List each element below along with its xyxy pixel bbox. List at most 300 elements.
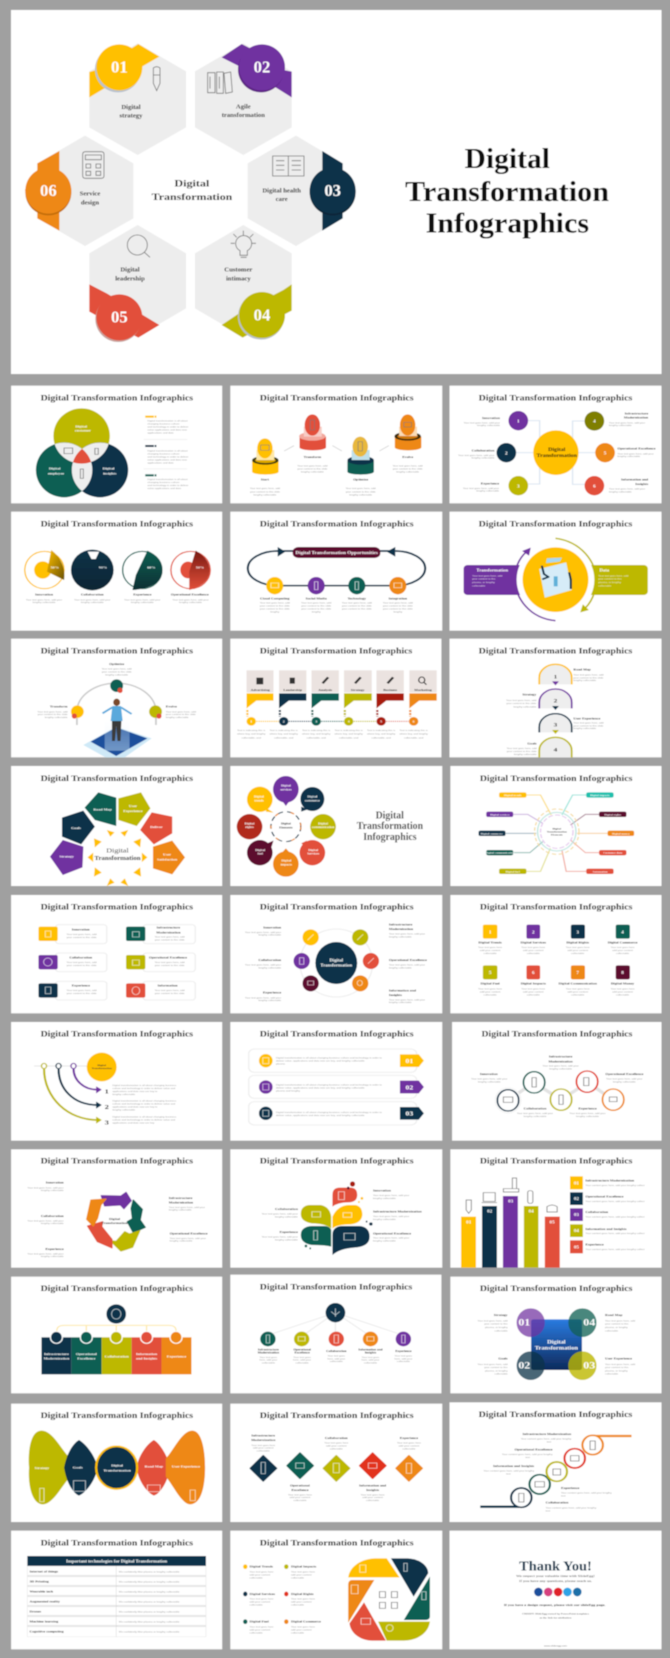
labels: lengthy collectable <box>275 1239 299 1241</box>
labels: plasma, or lengthy <box>485 1326 508 1329</box>
text column: Digital transformation is all about <box>147 420 188 423</box>
labels: text <box>561 1495 566 1498</box>
heading: Digital Transformation Infographics <box>41 774 193 784</box>
child nodes <box>260 1332 411 1346</box>
cards left: Collaboration <box>69 956 92 960</box>
labels: User Experience <box>573 717 601 720</box>
labels: Your text goes here <box>397 1442 422 1445</box>
labels <box>484 1432 612 1512</box>
slide side title: Transformation <box>357 821 424 832</box>
labels: your content to this <box>605 1366 629 1369</box>
panel: bar chart slide <box>450 1149 661 1268</box>
heading: Digital Transformation Infographics <box>480 1284 633 1294</box>
heading: Digital Transformation Infographics <box>479 1410 633 1420</box>
bow shapes: Strategy <box>35 1466 49 1470</box>
panel: staircase chain slide <box>450 1402 661 1522</box>
panel: orbit slide <box>230 895 442 1013</box>
labels: lengthy collectable <box>373 1197 397 1200</box>
labels: lengthy collectable <box>573 679 597 682</box>
pentagons: Road Map <box>93 808 112 811</box>
step marketing <box>399 670 437 739</box>
top icon <box>106 1304 126 1324</box>
table: We confidently filter plasma or lengthy collectable <box>119 1571 180 1573</box>
tiles row 2: add your content <box>612 991 633 994</box>
panel: shutter slide <box>230 1531 442 1649</box>
mind map connectors <box>505 795 608 871</box>
nodes: your content to this slide <box>342 608 372 611</box>
centre label and triangles: Transformation <box>94 855 141 862</box>
labels: collectable <box>402 1448 416 1450</box>
panel: zigzag rings slide <box>452 1022 661 1141</box>
labels: collectable <box>605 1373 619 1376</box>
legend: Your text goes here <box>291 1626 316 1628</box>
venn diagram: customer <box>75 429 91 433</box>
legend: Your text goes here <box>250 1626 274 1628</box>
panel: pentagons slide <box>11 766 222 886</box>
labels <box>262 1189 422 1243</box>
labels: Modernization <box>169 1201 193 1204</box>
step business: 5 <box>380 720 382 724</box>
venn diagram: Digital <box>103 467 114 471</box>
slide side title <box>357 811 424 843</box>
cards right: Your text goes here, add <box>155 961 185 964</box>
text column: applications and data <box>147 462 174 464</box>
column blocks: Operational <box>76 1352 97 1356</box>
card 01: plasma <box>276 1063 286 1066</box>
nodes: your content to this slide <box>383 605 413 608</box>
panel: bow shapes slide <box>11 1404 222 1522</box>
nodes: your content to this slide <box>301 608 332 611</box>
labels left: Experience <box>481 482 500 485</box>
labels: Innovation <box>263 926 281 929</box>
card 03: deliver value, applications and data now are key, and lengthy collectable <box>276 1114 365 1117</box>
legend: add your content <box>250 1629 271 1631</box>
labels: Your text goes here <box>288 1494 313 1496</box>
hexagon 01 digital strategy: strategy <box>120 113 143 120</box>
transformation box: Transformation <box>476 568 509 573</box>
labels: Modernization <box>251 1438 275 1442</box>
labels: lengthy collectable <box>275 1216 299 1218</box>
tiles row 1: 1 <box>489 930 492 934</box>
bubbles: Digital <box>307 795 317 799</box>
labels: lengthy collectable <box>41 1189 64 1192</box>
cards left: your content to this slide <box>67 936 97 939</box>
labels: Your text goes here, add <box>573 674 604 676</box>
pentagons: User <box>163 853 172 857</box>
legend: 02 <box>574 1197 580 1201</box>
labels: Your text goes here, add your <box>373 1237 409 1240</box>
legend: Digital Services <box>250 1592 276 1596</box>
heading: Digital Transformation Infographics <box>480 1157 633 1166</box>
chain rings <box>511 1435 603 1507</box>
centre label and triangles <box>88 830 147 886</box>
tiles row 1: 2 <box>532 930 535 934</box>
labels: your content to this <box>484 1323 508 1326</box>
bubbles: Digital <box>308 848 318 852</box>
main title: Transformation <box>405 177 609 208</box>
numbered text: Digital transformation is all about changing business <box>112 1116 177 1119</box>
ring innovation: 50% <box>51 566 59 569</box>
heading: Digital Transformation Infographics <box>41 1284 193 1294</box>
cards right: your content to this slide <box>155 939 185 941</box>
central circle with illustration <box>517 542 594 617</box>
labels: Experience <box>561 1486 580 1490</box>
panel: mind map slide <box>450 766 661 886</box>
pentagons: Strategy <box>59 855 74 858</box>
hexagon 01 digital strategy: 01 <box>111 58 128 77</box>
panel: three cards with tags slide <box>230 1022 442 1141</box>
labels: plasma, or lengthy <box>485 1370 508 1372</box>
labels right: Information and <box>621 478 648 482</box>
hexagon 02 agile transformation: transformation <box>222 112 265 119</box>
nodes: Integration <box>389 597 407 600</box>
labels: lengthy collectable <box>45 716 68 719</box>
tiles row 2: add your content <box>523 991 544 994</box>
labels: collectable <box>330 1360 344 1363</box>
labels: Transform <box>50 705 68 709</box>
panel: speech bubbles wheel slide <box>230 766 442 886</box>
ring operational excellence: lengthy collectable <box>179 601 203 604</box>
table: We confidently filter plasma or lengthy collectable <box>119 1621 180 1623</box>
cylinder start: lengthy collectable <box>254 494 277 496</box>
nodes: your content to this slide <box>301 605 332 608</box>
numbered nodes <box>497 411 615 495</box>
labels left: Innovation <box>482 416 500 420</box>
labels left: Your text goes here, add your <box>463 487 499 490</box>
labels: add your content <box>399 1445 420 1447</box>
numbered text: Digital transformation is all about changing business <box>112 1084 177 1087</box>
legend: Your content goes here, add your lengthy collect <box>585 1232 645 1235</box>
labels left: Collaboration <box>472 449 494 452</box>
data box: Data <box>600 568 610 573</box>
labels: Your text goes here, add your <box>169 1206 205 1209</box>
hexagon 04 customer intimacy <box>195 225 292 340</box>
labels: Operational Excellence <box>514 1448 553 1452</box>
cylinder evolve: lengthy collectable <box>396 471 420 474</box>
labels: Your content goes here, add your lengthy <box>484 1470 535 1472</box>
step advertising: Text is indicating this is <box>237 729 266 732</box>
labels: Goals <box>498 1357 508 1360</box>
labels: Your text goes here, add <box>605 1320 636 1323</box>
text column: changing business culture <box>147 423 180 426</box>
numbered text: Digital transformation is all about changing business <box>112 1100 177 1103</box>
labels: text <box>546 1510 550 1512</box>
tiles row 1: Digital Commerce <box>608 941 638 944</box>
tiles row 2: Digital Communication <box>558 982 597 986</box>
centre label: Digital <box>552 828 561 830</box>
heading: Digital Transformation Infographics <box>260 1030 414 1039</box>
cylinder evolve: your content to this slide <box>393 468 423 470</box>
cylinder start: your content to this slide <box>250 491 281 493</box>
labels: lengthy collectable <box>166 716 189 719</box>
labels: Modernization <box>548 1060 573 1063</box>
main title: Digital <box>464 144 550 175</box>
panel: arches slide <box>450 639 661 758</box>
labels: Your text goes here, add your <box>569 1112 606 1115</box>
hexagon 01 digital strategy <box>89 43 186 155</box>
text column: changing business culture <box>147 481 180 484</box>
bubbles: rights <box>245 825 255 829</box>
labels: Infrastructure <box>251 1434 276 1438</box>
ring innovation: lengthy collectable <box>33 601 56 604</box>
hexagon 03 digital health care: Digital health <box>262 187 301 194</box>
connectors <box>284 446 389 451</box>
column badges <box>50 1331 182 1343</box>
cards right: your content to this slide <box>155 964 185 967</box>
bar chart: 03 <box>508 1199 514 1204</box>
labels: Experience <box>280 1230 298 1234</box>
table: We confidently filter plasma or lengthy collectable <box>119 1591 180 1593</box>
labels: Your text goes here, add your <box>471 1078 508 1080</box>
labels <box>471 1055 644 1118</box>
table: Machine learning <box>29 1620 59 1623</box>
card 02: Digital transformation is all about changing business culture and technology in order to <box>276 1084 383 1087</box>
labels: Innovation <box>480 1072 498 1076</box>
cards left <box>38 925 107 1000</box>
step analysis: where key, and lengthy <box>302 733 331 736</box>
hexagon 05 digital leadership <box>89 225 186 342</box>
bubbles: impacts <box>281 863 293 866</box>
hexagon 02 agile transformation: Agile <box>236 103 251 110</box>
step advertising: where key, and lengthy <box>237 733 266 736</box>
labels left: lengthy collectable <box>476 490 500 493</box>
nodes: lengthy <box>270 611 280 613</box>
arc nodes <box>71 679 162 719</box>
labels: your content to this slide <box>573 677 604 679</box>
ring collaboration <box>71 550 114 604</box>
cards right: your content to this slide <box>155 992 185 995</box>
labels: Road Map <box>605 1313 623 1317</box>
labels: Collaboration <box>325 1436 348 1440</box>
legend: collectable <box>250 1604 263 1607</box>
tiles row 2: add your content <box>480 991 501 994</box>
nodes: your content to this slide <box>260 608 290 611</box>
step leadership: collectable, and <box>274 737 294 739</box>
labels: Collaboration <box>546 1501 569 1505</box>
labels: Collaboration <box>524 1107 546 1111</box>
labels: Strategy <box>494 1313 508 1317</box>
legend: Digital Commerce <box>291 1620 321 1624</box>
panel: hierarchy slide <box>230 1275 441 1393</box>
legend: Experience <box>585 1243 604 1246</box>
tiles row 1: Digital Rights <box>566 941 590 944</box>
labels: lengthy collectable <box>613 1081 636 1083</box>
tiles row 1: Digital Trends <box>478 941 503 944</box>
step strategy: 4 <box>348 720 350 724</box>
tiles row 1: add your content <box>612 949 633 952</box>
pills: Digital impacts <box>590 794 610 797</box>
nodes: your content to this slide <box>383 608 413 611</box>
nodes: Your text goes here, add <box>260 602 290 605</box>
data box: Your text goes here, add <box>598 575 629 577</box>
bubbles: Digital <box>281 784 291 788</box>
labels: Your text goes here, add <box>478 1320 508 1323</box>
step analysis: Analysis <box>318 688 333 692</box>
labels: Your text goes here, add your <box>389 964 425 967</box>
labels: lengthy collectable <box>389 1001 412 1004</box>
translucent circles: 04 <box>583 1318 596 1328</box>
orbit: Transformation <box>320 963 353 967</box>
column blocks: Excellence <box>77 1357 96 1361</box>
arc <box>77 683 156 725</box>
labels: collectable <box>495 1330 508 1332</box>
bubbles: Digital <box>254 795 264 799</box>
card 01: Digital transformation is all about changing business culture and technology in order to <box>276 1057 383 1060</box>
tiles row 2: 6 <box>532 971 535 975</box>
text column: changing business culture <box>147 453 180 455</box>
spokes <box>516 421 596 484</box>
labels: Your text goes here, add your <box>606 1078 643 1080</box>
labels left: Your text goes here, add your <box>458 454 495 457</box>
tiles row 2: Your text goes here <box>478 988 503 991</box>
cylinder optimize: your content to this slide <box>346 491 376 493</box>
pills: Automation <box>592 871 608 873</box>
labels right: lengthy collectable <box>609 424 632 427</box>
labels: lengthy collectable <box>105 674 129 676</box>
table: We confidently filter plasma or lengthy collectable <box>119 1631 180 1633</box>
labels: Goals <box>527 742 537 745</box>
labels <box>251 1434 422 1502</box>
thank you message <box>516 1574 595 1584</box>
labels: Your content goes here, add your lengthy <box>561 1492 612 1495</box>
labels: Information and <box>359 1484 386 1488</box>
labels right: Operational Excellence <box>617 447 656 451</box>
labels: Operational <box>293 1348 311 1351</box>
hexagon 04 customer intimacy: intimacy <box>226 276 251 283</box>
legend: Information and Insights <box>585 1227 627 1231</box>
labels: lengthy collectable <box>513 706 537 708</box>
numbered text: 3 <box>105 1119 109 1126</box>
nodes: your content to this slide <box>342 605 372 608</box>
text column: and technology in order to deliver <box>147 426 189 429</box>
column blocks: Collaboration <box>105 1355 129 1358</box>
centre wheel: Digital <box>281 822 291 825</box>
hexagon 02 agile transformation: 02 <box>254 58 270 77</box>
labels: Evolve <box>166 705 177 709</box>
panel: curved arrows slide <box>11 1022 222 1141</box>
step analysis <box>302 670 344 739</box>
step business: collectable, and <box>372 737 391 739</box>
labels: Your text goes here, add your <box>517 1112 553 1115</box>
column blocks: Modernization <box>44 1357 69 1361</box>
table: Wearable tech <box>29 1590 53 1593</box>
labels: lengthy collectable <box>169 1209 192 1212</box>
bow shapes <box>29 1431 205 1504</box>
nodes: lengthy <box>312 611 322 613</box>
tiles row 2: Digital Fuel <box>480 982 500 986</box>
labels: Your text goes here, add your <box>262 1236 298 1238</box>
ring innovation: Your text goes here, add your <box>26 599 62 601</box>
tiles row 2: collectable <box>616 994 630 997</box>
labels: lengthy collectable <box>170 1240 193 1243</box>
panel: diamonds slide <box>230 1404 442 1522</box>
legend: collectable <box>250 1577 263 1579</box>
legend <box>243 1564 321 1634</box>
bubbles: commerce <box>305 799 320 802</box>
tiles row 2: 8 <box>621 971 625 975</box>
bubbles: fuel <box>257 852 263 856</box>
labels: lengthy collectable <box>389 967 412 969</box>
top node <box>326 1303 345 1322</box>
venn diagram: Digital <box>75 425 87 428</box>
card 01: 01 <box>406 1059 414 1065</box>
legend: Your content goes here, add your lengthy collect <box>585 1200 645 1203</box>
labels: lengthy collectable <box>478 1081 501 1083</box>
labels: Your text goes here, add your <box>27 1220 64 1222</box>
labels: add your content <box>290 1496 311 1499</box>
legend: 03 <box>574 1213 580 1217</box>
labels: lengthy collectable <box>524 1115 547 1118</box>
text column: Digital transformation is all about <box>147 450 188 452</box>
labels: Your text goes here, add your <box>170 1237 206 1240</box>
step business: where key, and lengthy <box>367 733 396 736</box>
numbered nodes: 1 <box>517 419 520 423</box>
labels: Your text goes here, add <box>573 722 604 724</box>
panel: table slide <box>11 1531 222 1649</box>
tiles row 2: collectable <box>484 994 497 997</box>
banner <box>293 547 380 558</box>
labels: Your text goes here, add <box>605 1363 636 1366</box>
labels: lengthy collectable <box>258 934 282 937</box>
labels: your content to this slide <box>507 750 537 753</box>
heading: Digital Transformation Infographics <box>260 903 414 912</box>
ring operational excellence: 50% <box>196 566 204 569</box>
legend: add your content <box>250 1574 271 1576</box>
legend: Operational Excellence <box>585 1195 624 1198</box>
labels: Your text goes here, add your <box>245 931 281 934</box>
ring collaboration: lengthy collectable <box>81 601 104 604</box>
slide side title: Digital <box>376 811 404 821</box>
labels: here, add your <box>293 1359 311 1362</box>
bubbles: services <box>280 788 292 792</box>
labels: your content to this <box>484 1366 508 1369</box>
panel: cover slide <box>11 10 662 374</box>
legend: add your content <box>250 1601 271 1604</box>
hexagon 02 agile transformation <box>195 43 292 155</box>
pills: Digital services <box>490 814 510 816</box>
panel: speech leaf shapes slide <box>230 1149 442 1268</box>
legend: collectable <box>291 1577 305 1579</box>
nodes: Your text goes here, add <box>383 602 414 605</box>
hexagon 04 customer intimacy: Customer <box>224 267 252 274</box>
venn diagram: employee <box>48 472 64 475</box>
legend: Digital Rights <box>291 1592 314 1596</box>
heading: Digital Transformation Infographics <box>260 1538 414 1548</box>
tiles row 2: Your text goes here <box>611 988 635 991</box>
labels: plasma, or lengthy <box>605 1326 629 1329</box>
bar icons <box>466 1178 557 1213</box>
labels: lengthy collectable <box>41 1222 64 1225</box>
legend: 05 <box>574 1245 580 1249</box>
venn diagram: insights <box>103 472 117 475</box>
translucent circles <box>517 1308 597 1380</box>
labels: Your text goes here, add <box>102 668 132 671</box>
labels: Your text goes here, add your <box>373 1215 409 1218</box>
nodes <box>260 577 414 613</box>
labels right: lengthy collectable <box>617 455 641 458</box>
heading: Digital Transformation Infographics <box>260 520 414 529</box>
numbered nodes: 6 <box>593 484 596 488</box>
labels: collectable <box>397 1360 411 1363</box>
labels: Modernization <box>389 927 413 931</box>
ring operational excellence <box>171 551 210 604</box>
bubbles: Services <box>307 852 320 856</box>
labels: Information and Insights <box>493 1464 535 1468</box>
legend: Digital Trends <box>250 1565 274 1569</box>
panel: transformation and data slide <box>450 512 661 631</box>
pentagons: Satisfaction <box>157 858 177 861</box>
cards right: Your text goes here, add <box>155 989 185 992</box>
